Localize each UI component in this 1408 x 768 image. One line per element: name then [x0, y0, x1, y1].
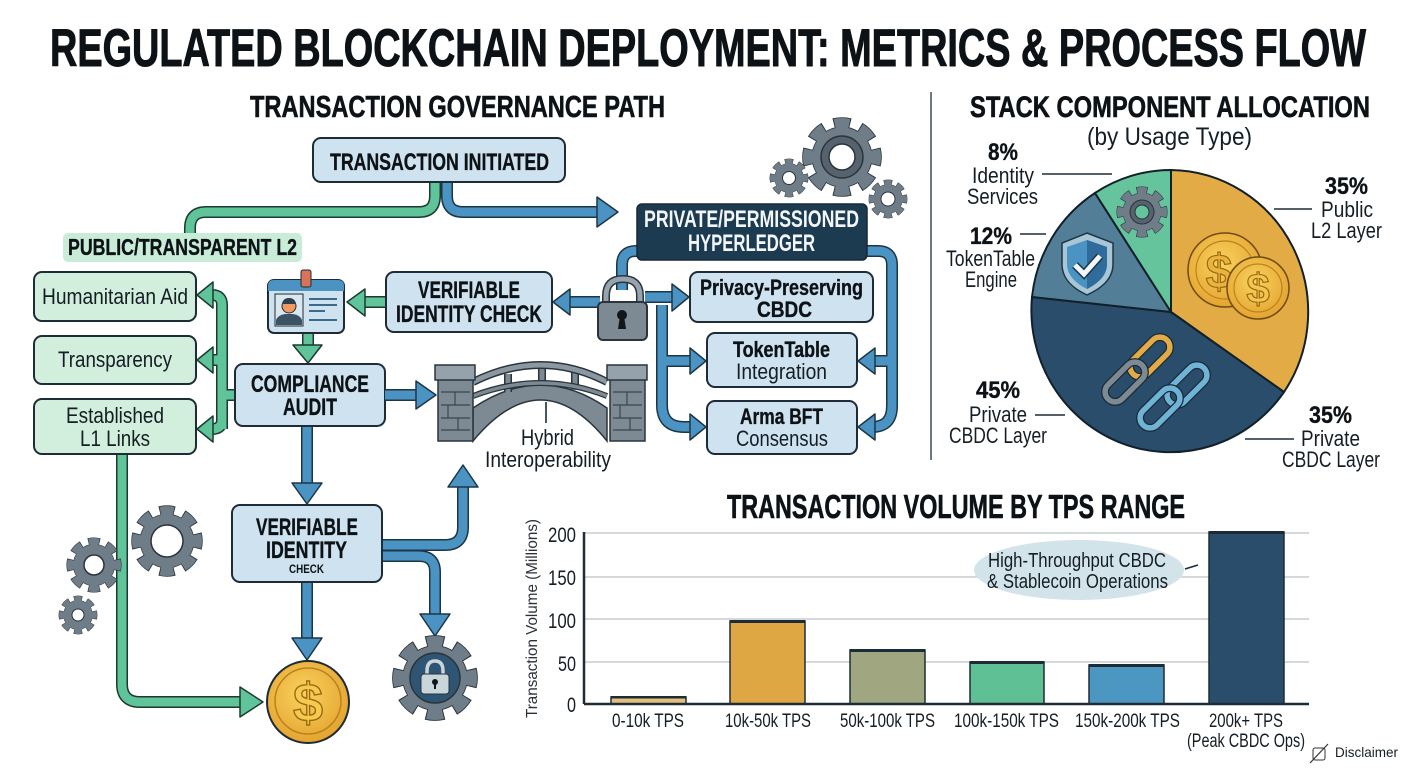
icon: chain links: [1101, 333, 1211, 432]
y axis ticks: 50: [558, 653, 576, 676]
box: verifiable identity check lower: [232, 505, 382, 582]
y axis ticks: [548, 524, 576, 717]
label: 45% private CBDC layer: [949, 377, 1065, 448]
x axis labels: 50k-100k TPS: [840, 711, 935, 732]
arrow: identity check to card: [347, 289, 386, 316]
arrow: verifiable identity to bridge: [381, 465, 478, 545]
x axis labels: (Peak CBDC Ops): [1187, 731, 1305, 752]
box: verifiable identity check: IDENTITY CHECK: [396, 301, 542, 328]
slice: private CBDC layer: [1031, 297, 1284, 452]
arrow: compliance audit to verifiable identity: [292, 424, 322, 504]
pie chart: [1031, 170, 1308, 452]
icon: stacked coins: [1188, 233, 1289, 319]
box: private permissioned hyperledger: PRIVATE/PERMISSIONED: [644, 206, 859, 233]
box: privacy-preserving CBDC: CBDC: [757, 297, 812, 322]
arrow: compliance audit to bridge: [385, 381, 436, 409]
bar: 50k-100k TPS: [850, 649, 925, 704]
label: 35% public L2 layer: Public: [1321, 197, 1373, 222]
label: 35% public L2 layer: 35%: [1325, 173, 1368, 200]
box: verifiable identity check lower: VERIFIABLE: [256, 514, 358, 541]
x axis labels: 100k-150k TPS: [954, 711, 1059, 732]
label: hybrid interoperability: [485, 402, 611, 472]
icon: shield: [1062, 233, 1113, 295]
box: transparency: [34, 336, 196, 384]
icon: slice gear: [1116, 186, 1168, 238]
axes: [584, 532, 1309, 704]
label: 35% private CBDC layer: CBDC Layer: [1282, 447, 1380, 472]
slice: identity services: [1095, 170, 1171, 312]
bar: 200k+ TPS: [1209, 531, 1284, 704]
callout: high-throughput CBDC: [974, 540, 1198, 600]
arrow: lock to privacy-preserving CBDC: [645, 284, 689, 311]
icon: gear with lock: [392, 635, 478, 721]
label: 12% tokentable engine: [946, 223, 1046, 292]
divider: [930, 92, 932, 460]
icon: stacked coins: $: [1206, 246, 1233, 299]
box: verifiable identity check: VERIFIABLE: [418, 277, 520, 304]
y axis ticks: 150: [548, 567, 576, 590]
box: transparency: Transparency: [58, 347, 172, 372]
icon: identity card: [268, 270, 344, 333]
icon: stacked coins: $: [1246, 265, 1270, 312]
box: transaction initiated: TRANSACTION INITIATED: [330, 149, 549, 176]
label: hybrid interoperability: Interoperability: [485, 447, 611, 472]
arrow: lock to verifiable identity check: [553, 289, 600, 315]
disclaimer: Disclaimer: [1335, 744, 1398, 760]
icon: gears top right: [770, 117, 907, 218]
heading: transaction volume by TPS range: TRANSACTION VOLUME BY TPS RANGE: [727, 488, 1185, 525]
box: established L1 links: Established: [66, 403, 164, 428]
box: privacy-preserving CBDC: [690, 272, 873, 322]
bar: 100k-150k TPS: [970, 661, 1044, 704]
bar: 150k-200k TPS: [1089, 664, 1164, 704]
arrows: private hyperledger right branch: [858, 251, 892, 440]
icon: hybrid bridge: [435, 365, 647, 441]
icon: padlock: [598, 279, 647, 340]
box: established L1 links: [34, 399, 196, 454]
x axis labels: 0-10k TPS: [612, 711, 684, 732]
box: tokentable integration: [707, 333, 857, 387]
box: compliance audit: COMPLIANCE: [251, 371, 369, 398]
box: compliance audit: [235, 364, 385, 426]
box: transaction initiated: [313, 138, 565, 182]
box: arma BFT consensus: Consensus: [736, 426, 828, 451]
label: 12% tokentable engine: Engine: [965, 267, 1017, 292]
label: 35% private CBDC layer: 35%: [1309, 402, 1352, 429]
box: humanitarian aid: Humanitarian Aid: [42, 284, 188, 309]
label: 35% private CBDC layer: [1245, 402, 1380, 472]
x axis labels: [612, 711, 1305, 752]
arrow: initiated to private hyperledger: [447, 180, 618, 227]
box: humanitarian aid: [34, 272, 196, 321]
bar: 0-10k TPS: [611, 696, 686, 704]
box: compliance audit: AUDIT: [283, 394, 337, 421]
x axis labels: 10k-50k TPS: [725, 711, 811, 732]
icon: gears lower left: [59, 505, 203, 634]
box: tokentable integration: Integration: [736, 359, 827, 384]
box: private permissioned hyperledger: HYPERLEDGER: [688, 230, 815, 257]
disclaimer: [1310, 744, 1398, 763]
label: 45% private CBDC layer: 45%: [976, 377, 1020, 404]
x axis labels: 150k-200k TPS: [1075, 711, 1180, 732]
heading: stack component allocation: (by Usage Type): [1087, 123, 1252, 151]
box: verifiable identity check: [386, 272, 552, 332]
arrows: compliance audit to public outcomes: [197, 282, 236, 442]
label: 35% public L2 layer: L2 Layer: [1311, 218, 1382, 243]
box: verifiable identity check lower: IDENTITY: [266, 537, 347, 564]
y axis ticks: 0: [567, 694, 576, 717]
y axis title: Transaction Volume (Millions): [524, 519, 541, 718]
bar: 10k-50k TPS: [730, 620, 805, 704]
y axis ticks: 100: [548, 610, 576, 633]
icon: gold coin: $: [293, 673, 323, 733]
label: 45% private CBDC layer: CBDC Layer: [949, 423, 1047, 448]
box: private permissioned hyperledger: [637, 204, 867, 260]
arrow: verifiable identity to gear lock: [381, 556, 450, 636]
label: 8% identity services: Identity: [972, 163, 1034, 188]
box: privacy-preserving CBDC: Privacy-Preserving: [700, 275, 863, 300]
label: 45% private CBDC layer: Private: [969, 402, 1027, 427]
arrow: initiated to public L2: [190, 180, 435, 236]
label: 8% identity services: [967, 139, 1112, 209]
box: verifiable identity check lower: CHECK: [289, 562, 324, 576]
callout: high-throughput CBDC: & Stablecoin Operations: [987, 571, 1168, 593]
label: public transparent L2: PUBLIC/TRANSPARENT L2: [68, 234, 297, 260]
x axis labels: 200k+ TPS: [1209, 711, 1283, 732]
callout: high-throughput CBDC: High-Throughput CBDC: [988, 550, 1166, 572]
label: 12% tokentable engine: 12%: [970, 223, 1012, 250]
label: hybrid interoperability: Hybrid: [521, 425, 574, 450]
y axis ticks: 200: [548, 524, 576, 547]
heading: transaction governance path: TRANSACTION GOVERNANCE PATH: [250, 89, 665, 124]
label: 8% identity services: 8%: [988, 139, 1018, 166]
arrow: verifiable identity to coin: [292, 580, 322, 660]
box: arma BFT consensus: Arma BFT: [740, 404, 823, 429]
heading: stack component allocation: [970, 91, 1370, 151]
label: 35% private CBDC layer: Private: [1301, 426, 1360, 451]
slice: tokentable engine: [1032, 193, 1171, 312]
box: tokentable integration: TokenTable: [733, 337, 830, 362]
label: 8% identity services: Services: [967, 184, 1038, 209]
box: established L1 links: L1 Links: [80, 426, 150, 451]
bar chart: [524, 519, 1309, 752]
icon: gold coin: [267, 661, 349, 743]
arrow: established links to coin: [122, 452, 263, 717]
arrow: card to compliance audit: [293, 334, 322, 363]
box: arma BFT consensus: [707, 401, 857, 454]
label: 12% tokentable engine: TokenTable: [946, 246, 1035, 271]
slice: public L2 layer: [1171, 170, 1308, 392]
arrows: private hyperledger left branch: [622, 251, 706, 440]
label: 35% public L2 layer: [1274, 173, 1382, 243]
